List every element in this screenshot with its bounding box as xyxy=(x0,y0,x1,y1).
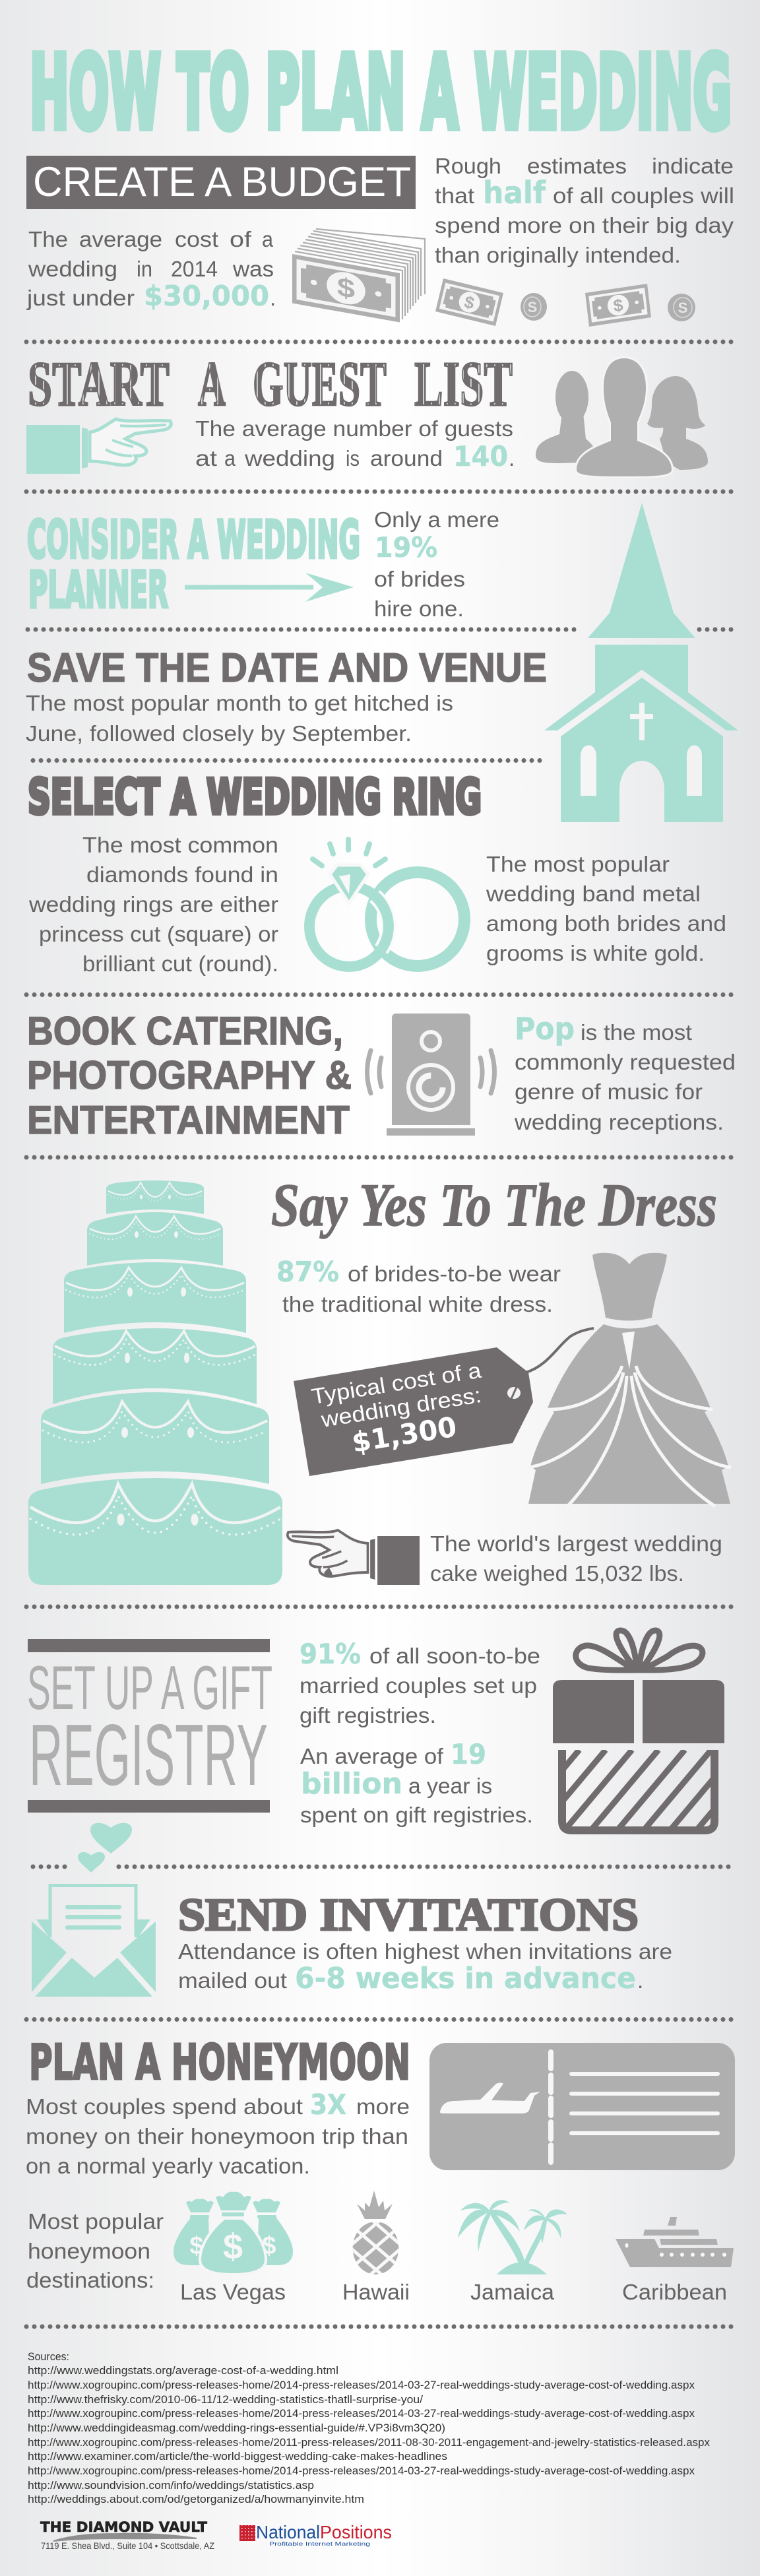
price tag: Typical cost of a xyxy=(309,1358,484,1409)
sources: Sources: xyxy=(28,2350,69,2363)
text: 19 percent: hire one. xyxy=(374,596,464,621)
text: honeymoon spending: money on their honeymoon trip than xyxy=(26,2124,408,2148)
text: popular destinations: honeymoon xyxy=(28,2239,150,2263)
panel: say yes to the dress xyxy=(271,1171,731,1586)
heading: book catering xyxy=(27,1009,352,1142)
panel: book catering xyxy=(27,1009,736,1142)
sources: http://www.thefrisky.com/2010-06-11/12-wedding-statistics-thatll-surprise-you/ xyxy=(28,2393,423,2406)
text: pop music xyxy=(514,1011,736,1134)
text: 87 percent: the traditional white dress. xyxy=(282,1292,553,1316)
text: popular destinations: destinations: xyxy=(26,2268,154,2292)
text: common diamonds xyxy=(28,833,278,976)
panel: create a budget xyxy=(26,154,734,327)
text: registry stats: of all soon-to-be xyxy=(369,1644,540,1668)
text: common diamonds: princess cut (square) or xyxy=(39,922,278,946)
text: attendance: . xyxy=(637,1968,643,1993)
destination: las vegas: $ xyxy=(223,2227,243,2267)
text: registry stats: a year is xyxy=(408,1774,492,1798)
text: honeymoon spending: Most couples spend about xyxy=(26,2094,303,2119)
text: half of couples: spend more on their big day xyxy=(435,213,734,238)
icon: coin one xyxy=(521,293,547,321)
text: common diamonds: brilliant cut (round). xyxy=(82,951,278,976)
icon: speaker xyxy=(367,1014,495,1136)
text: popular metal: grooms is white gold. xyxy=(486,941,705,965)
heading: start a guest list: GUEST xyxy=(253,348,387,419)
text: average cost: $30,000 xyxy=(144,280,269,312)
icon: coin two xyxy=(668,294,695,321)
text: popular month xyxy=(26,691,453,746)
panel: consider a wedding planner xyxy=(27,507,499,621)
logo: national positions xyxy=(239,2522,392,2547)
text: popular destinations xyxy=(26,2209,164,2292)
text: number of guests: The average number of guests xyxy=(195,416,513,441)
text: popular metal: The most popular xyxy=(486,852,670,876)
heading: start a guest list: A xyxy=(198,348,226,419)
destination: hawaii: Hawaii xyxy=(342,2280,410,2304)
logo: national positions: Positions xyxy=(320,2522,392,2542)
destination: caribbean xyxy=(616,2217,734,2304)
heading: set up a gift registry: SET UP A GIFT xyxy=(27,1653,272,1722)
destination: las vegas xyxy=(174,2192,293,2304)
text: average cost: wedding xyxy=(28,257,117,281)
icon: coin one: S xyxy=(528,299,537,315)
heading: start a guest list xyxy=(28,348,513,419)
panel: save the date and venue xyxy=(26,645,547,746)
icon: small bill two: $ xyxy=(612,295,625,316)
icon: coin two: S xyxy=(678,300,687,316)
heading: book catering: PHOTOGRAPHY & xyxy=(27,1053,352,1097)
heading: plan a honeymoon: PLAN A HONEYMOON xyxy=(29,2034,410,2091)
text: pop music: is the most xyxy=(581,1020,692,1045)
text: half of couples: Rough xyxy=(435,154,501,178)
text: number of guests: . xyxy=(509,446,515,470)
destination: hawaii xyxy=(344,2191,408,2300)
text: half of couples: indicate xyxy=(652,154,734,178)
arrow xyxy=(185,573,354,602)
heading: set up a gift registry xyxy=(27,1639,272,1813)
text: 19 percent: of brides xyxy=(374,567,465,591)
sources: http://weddings.about.com/od/getorganized/a/howmanyinvite.htm xyxy=(28,2493,364,2505)
heading: send invitations: SEND INVITATIONS xyxy=(178,1890,639,1941)
text: pop music: genre of music for xyxy=(515,1079,703,1104)
text: average cost: of xyxy=(230,227,252,251)
icon: gift xyxy=(553,1627,724,1834)
destination: las vegas: $ xyxy=(262,2232,276,2260)
text: average cost: The xyxy=(28,227,68,251)
heading: consider a wedding planner: CONSIDER A WEDDING xyxy=(27,511,360,570)
text: honeymoon spending: more xyxy=(356,2094,410,2119)
heading: book catering: ENTERTAINMENT xyxy=(27,1098,350,1142)
text: attendance: mailed out xyxy=(178,1968,287,1993)
sources: http://www.xogroupinc.com/press-releases-home/2014-press-releases/2014-03-27-real-weddings-study-average-cost-of-wedding.aspx xyxy=(28,2407,695,2420)
text: attendance: Attendance is often highest when invitations are xyxy=(178,1939,672,1964)
text: half of couples: estimates xyxy=(527,154,627,178)
text: half of couples xyxy=(435,154,734,267)
sources: http://www.xogroupinc.com/press-releases-home/2014-press-releases/2014-03-27-real-weddings-study-average-cost-of-wedding.aspx xyxy=(28,2464,695,2477)
text: half of couples: that xyxy=(435,183,474,208)
logo: the diamond vault xyxy=(40,2519,214,2551)
section dividers xyxy=(26,342,734,2327)
panel: plan a honeymoon xyxy=(26,2042,735,2304)
text: common diamonds: wedding rings are either xyxy=(28,892,278,917)
text: pop music: commonly requested xyxy=(515,1050,736,1074)
text: average cost: cost xyxy=(175,227,218,251)
heading: start a guest list: LIST xyxy=(414,348,513,419)
price tag xyxy=(294,1328,594,1476)
heading: set up a gift registry: REGISTRY xyxy=(29,1706,268,1803)
destination: las vegas: $ xyxy=(189,2232,204,2260)
sources: http://www.examiner.com/article/the-world-biggest-wedding-cake-makes-headlines xyxy=(28,2450,447,2463)
text: popular destinations: Most popular xyxy=(28,2209,164,2234)
icon: money stack: $ xyxy=(337,271,355,304)
sources: http://www.xogroupinc.com/press-releases-home/2011-press-releases/2011-08-30-2011-engagement-and-jewelry-statistics-released.aspx xyxy=(28,2436,710,2449)
heading: consider a wedding planner: PLANNER xyxy=(28,560,168,619)
icon: small bill two xyxy=(585,284,651,327)
text: average cost: . xyxy=(270,286,276,310)
heading: consider a wedding planner xyxy=(27,511,360,619)
text: attendance: 6-8 weeks in advance xyxy=(295,1962,636,1995)
icon: people silhouettes xyxy=(536,358,708,476)
text: average cost: in xyxy=(137,257,152,281)
illustration: wedding cake xyxy=(28,1180,282,1585)
text: average cost: 2014 xyxy=(171,257,218,281)
icon: small bill one xyxy=(435,278,503,326)
text: common diamonds: The most common xyxy=(82,833,278,857)
text: number of guests: at xyxy=(195,446,217,470)
text: common diamonds: diamonds found in xyxy=(86,862,278,887)
text: number of guests: a xyxy=(224,446,236,470)
text: average cost: average xyxy=(79,227,162,251)
icon: hearts xyxy=(78,1823,132,1873)
text: number of guests: 140 xyxy=(453,440,508,472)
text: registry stats: spent on gift registries. xyxy=(300,1803,533,1827)
text: average cost: a xyxy=(262,227,274,251)
text: largest cake xyxy=(430,1531,722,1586)
icon: church xyxy=(544,503,738,822)
text: 19 percent xyxy=(374,507,499,621)
text: number of guests: is xyxy=(346,446,360,470)
heading: select a ring: SELECT A WEDDING RING xyxy=(28,769,482,825)
text: largest cake: cake weighed 15,032 lbs. xyxy=(430,1561,684,1586)
text: registry stats: billion xyxy=(301,1767,402,1801)
icon: envelope xyxy=(32,1886,156,1997)
heading: create a budget: CREATE A BUDGET xyxy=(33,159,411,205)
logo: the diamond vault: 7119 E. Shea Blvd., Suite 104 • Scottsdale, AZ xyxy=(41,2540,214,2551)
icon: plane ticket xyxy=(429,2043,735,2170)
text: largest cake: The world's largest wedding xyxy=(430,1531,722,1556)
text: registry stats: gift registries. xyxy=(300,1703,436,1727)
icon: wedding rings xyxy=(309,839,464,967)
destination: jamaica xyxy=(458,2200,567,2304)
logo: national positions: Profitable Internet Marketing xyxy=(269,2541,370,2547)
price tag: $1,300 xyxy=(350,1410,459,1459)
heading: save the date: SAVE THE DATE AND VENUE xyxy=(27,645,547,691)
text: 87 percent: 87% xyxy=(276,1256,339,1288)
destination: caribbean: Caribbean xyxy=(622,2280,727,2304)
text: 87 percent: of brides-to-be wear xyxy=(348,1262,561,1286)
text: popular month: June, followed closely by September. xyxy=(26,721,412,746)
text: number of guests: around xyxy=(370,446,443,470)
panel: send invitations xyxy=(32,1886,672,1997)
panel: start a guest list xyxy=(26,348,708,476)
text: average cost xyxy=(26,227,276,312)
text: registry stats: married couples set up xyxy=(300,1673,537,1698)
text: popular metal: among both brides and xyxy=(486,911,726,936)
text: pop music: wedding receptions. xyxy=(514,1110,724,1134)
text: registry stats: 19 xyxy=(451,1738,486,1770)
panel: select a wedding ring xyxy=(28,769,726,976)
icon: pointing hand left xyxy=(288,1530,420,1585)
text: half of couples: than originally intended. xyxy=(435,243,681,267)
sources: http://www.weddingideasmag.com/wedding-rings-essential-guide/#.VP3i8vm3Q20) xyxy=(28,2422,445,2434)
heading: book catering: BOOK CATERING, xyxy=(27,1009,343,1053)
text: 19 percent: Only a mere xyxy=(374,507,499,532)
text: honeymoon spending: 3X xyxy=(310,2088,346,2121)
text: pop music: Pop xyxy=(515,1011,575,1046)
text: registry stats: An average of xyxy=(300,1744,444,1768)
text: half of couples: half xyxy=(483,175,546,210)
text: number of guests xyxy=(195,416,515,472)
icon: money stack xyxy=(292,229,425,322)
logo: national positions: National xyxy=(256,2522,320,2542)
text: registry stats xyxy=(300,1638,540,1827)
text: 87 percent xyxy=(276,1256,561,1316)
text: attendance xyxy=(178,1939,672,1995)
price tag: wedding dress: xyxy=(319,1382,483,1432)
text: honeymoon spending xyxy=(26,2088,410,2178)
destination: jamaica: Jamaica xyxy=(470,2280,555,2304)
sources: http://www.soundvision.com/info/weddings/statistics.asp xyxy=(28,2479,314,2492)
text: average cost: was xyxy=(232,257,274,281)
icon: pointing hand xyxy=(26,419,171,474)
panel: gift registry xyxy=(27,1630,760,1873)
text: average cost: just under xyxy=(26,286,135,310)
text: registry stats: 91% xyxy=(300,1638,361,1670)
icon: small bill one: $ xyxy=(462,292,477,313)
destination: las vegas: Las Vegas xyxy=(180,2280,286,2304)
text: popular metal xyxy=(486,852,726,965)
text: popular month: The most popular month to get hitched is xyxy=(26,691,453,715)
text: honeymoon spending: on a normal yearly vacation. xyxy=(26,2154,310,2178)
text: popular metal: wedding band metal xyxy=(486,882,701,906)
logo: the diamond vault: THE DIAMOND VAULT xyxy=(40,2519,208,2535)
illustration: dress xyxy=(528,1253,731,1506)
heading: start a guest list: START xyxy=(28,348,170,419)
text: half of couples: of all couples will xyxy=(553,183,734,208)
sources: http://www.weddingstats.org/average-cost-of-a-wedding.html xyxy=(28,2364,338,2377)
text: 19 percent: 19% xyxy=(375,531,437,564)
sources xyxy=(28,2350,710,2505)
sources: http://www.xogroupinc.com/press-releases-home/2014-press-releases/2014-03-27-real-weddings-study-average-cost-of-wedding.aspx xyxy=(28,2379,695,2391)
text: number of guests: wedding xyxy=(244,446,335,470)
